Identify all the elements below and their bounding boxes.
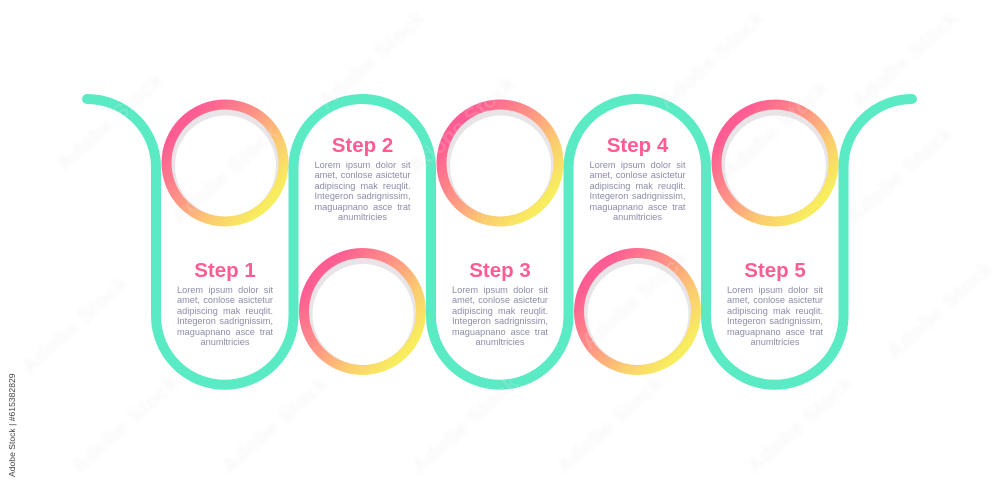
wavy teal ribbon: [87, 99, 912, 385]
step 4 text: anumltricies: [613, 212, 662, 222]
faint repeating watermark: Adobe Stock: [576, 245, 693, 354]
step 3 text: [452, 285, 548, 347]
step 2 text: [314, 160, 410, 222]
step 4 heading: Step 4: [607, 134, 668, 157]
step 3 text: Lorem ipsum dolor sit: [452, 285, 548, 295]
step 2: [314, 134, 410, 222]
step 2 text: amet, conlose asictetur: [314, 170, 410, 180]
step 1 text: Lorem ipsum dolor sit: [177, 285, 273, 295]
step 5 text: Integeron sadrignissim,: [727, 316, 823, 326]
step 4 text: adipiscing mak reuqlit.: [590, 181, 686, 191]
faint repeating watermark: Adobe Stock: [881, 255, 998, 364]
faint repeating watermark: Adobe Stock: [551, 370, 668, 479]
step 1 text: Integeron sadrignissim,: [177, 316, 273, 326]
step 5 text: maguapnano asce trat: [727, 327, 823, 337]
ring 2: [304, 253, 421, 370]
step 5: [727, 259, 823, 347]
faint repeating watermark: Adobe Stock: [741, 370, 858, 479]
faint repeating watermark: Adobe Stock: [313, 5, 430, 114]
step 5 heading: Step 5: [744, 259, 806, 282]
faint repeating watermark: Adobe Stock: [216, 370, 333, 479]
step 4 text: Integeron sadrignissim,: [590, 191, 686, 201]
faint repeating watermark: Adobe Stock: [403, 70, 520, 179]
step 2 text: adipiscing mak reuqlit.: [314, 181, 410, 191]
step 5 text: amet, conlose asictetur: [727, 295, 823, 305]
step 3: [452, 259, 548, 347]
step 3 text: adipiscing mak reuqlit.: [452, 306, 548, 316]
step 2 text: maguapnano asce trat: [314, 202, 410, 212]
step 5 text: anumltricies: [750, 337, 800, 347]
stock image credit: Adobe Stock | #615382829: [7, 373, 17, 477]
step 5 text: adipiscing mak reuqlit.: [727, 306, 823, 316]
step 1 text: anumltricies: [200, 337, 250, 347]
step 3 text: anumltricies: [475, 337, 524, 347]
faint repeating watermark: Adobe Stock: [51, 67, 168, 176]
step 2 heading: Step 2: [332, 134, 393, 157]
step 1 text: maguapnano asce trat: [177, 327, 273, 337]
step 4 text: amet, conlose asictetur: [590, 170, 686, 180]
step 2 text: Integeron sadrignissim,: [314, 191, 410, 201]
ring 5: [716, 104, 834, 222]
faint repeating watermark: Adobe Stock: [846, 5, 963, 114]
step 3 heading: Step 3: [469, 259, 531, 282]
faint repeating watermark: Adobe Stock: [841, 120, 958, 229]
step 2 text: Lorem ipsum dolor sit: [314, 160, 410, 170]
faint repeating watermark: Adobe Stock: [166, 120, 283, 229]
step 4: [590, 134, 686, 222]
faint repeating watermark: Adobe Stock: [716, 75, 833, 184]
step 4 text: maguapnano asce trat: [590, 202, 686, 212]
faint repeating watermark: Adobe Stock: [653, 5, 770, 114]
ring 3: [442, 104, 558, 222]
step 1 text: amet, conlose asictetur: [177, 295, 273, 305]
faint repeating watermark: Adobe Stock: [16, 270, 133, 379]
faint repeating watermark: Adobe Stock: [66, 370, 183, 479]
step 5 text: [727, 285, 823, 347]
step 5 text: Lorem ipsum dolor sit: [727, 285, 823, 295]
faint repeating watermark: Adobe Stock: [406, 370, 523, 479]
step 3 text: Integeron sadrignissim,: [452, 316, 548, 326]
step 2 text: anumltricies: [338, 212, 387, 222]
step 1: [177, 259, 273, 347]
step 3 text: amet, conlose asictetur: [452, 295, 548, 305]
step 3 text: maguapnano asce trat: [452, 327, 548, 337]
step 4 text: Lorem ipsum dolor sit: [590, 160, 686, 170]
ring 4: [579, 253, 696, 370]
step 4 text: [590, 160, 686, 222]
step 1 text: [177, 285, 273, 347]
step 1 text: adipiscing mak reuqlit.: [177, 306, 273, 316]
step 1 heading: Step 1: [194, 259, 256, 282]
ring 1: [166, 104, 284, 222]
